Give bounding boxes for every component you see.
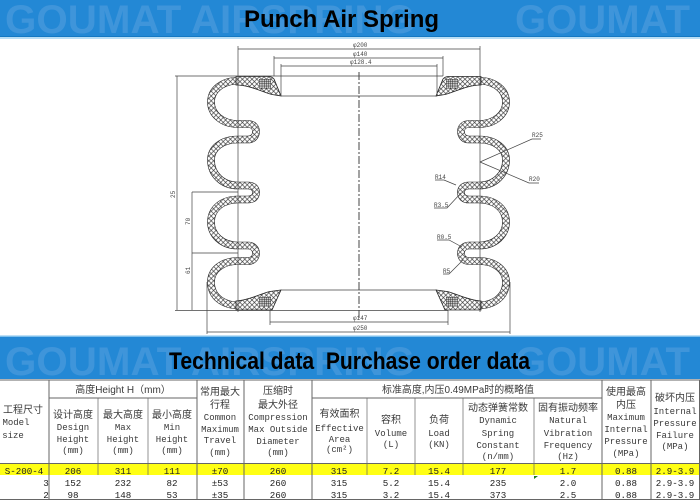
data row: 3: 235 — [490, 478, 506, 489]
column: max height: Height — [107, 435, 139, 445]
column: internal pressure failure: Failure — [656, 431, 694, 441]
data row: S-200-4: 7.2 — [383, 466, 399, 477]
column: model size: 工程尺寸 — [3, 403, 43, 416]
title: Punch Air Spring — [244, 6, 439, 33]
data row: 3: 0.88 — [615, 478, 637, 489]
centre line — [358, 72, 360, 318]
data row: 3: 5.2 — [383, 478, 399, 489]
column: min height: (mm) — [161, 446, 183, 456]
data row: S-200-4: 111 — [164, 466, 181, 477]
column: maximum travel: Common — [204, 413, 236, 423]
column: max height — [103, 408, 143, 456]
column: maximum internal pressure: Pressure — [604, 437, 648, 447]
cell comment marker — [534, 476, 538, 479]
dimension labels: R3.5 — [434, 202, 449, 209]
data row: S-200-4: 260 — [270, 466, 286, 477]
column: dynamic spring constant: 动态弹簧常数 — [468, 401, 528, 414]
column: design height: Height — [57, 435, 89, 445]
dimension labels — [170, 42, 543, 332]
data row: 3: 2.0 — [560, 478, 576, 489]
column: load: 负荷 — [429, 413, 449, 426]
column: model size: size — [2, 431, 24, 441]
column: effective area: (cm²) — [326, 445, 353, 455]
column: compression diameter — [248, 384, 308, 458]
data row: 3: 152 — [65, 478, 81, 489]
technical drawing: air spring cross-section — [170, 42, 543, 334]
data row: S-200-4: 15.4 — [428, 466, 451, 477]
specification table — [0, 380, 700, 500]
column: dynamic spring constant: (n/mm) — [482, 452, 514, 462]
dimension labels: 25 — [170, 190, 177, 198]
column: effective area: Area — [329, 435, 351, 445]
column: max height: 最大高度 — [103, 408, 143, 421]
column: dynamic spring constant: Dynamic — [479, 416, 517, 426]
column: compression diameter: 压缩时 — [263, 384, 293, 397]
left half of spring bellows — [211, 76, 281, 310]
column: maximum internal pressure: (MPa) — [612, 449, 640, 459]
column: natural vibration frequency: Natural — [549, 416, 587, 426]
data row: 3: 15.4 — [428, 478, 451, 489]
data row: 3: 260 — [270, 478, 286, 489]
data row: 3: 3 — [43, 478, 49, 489]
data row: 3: 2.9-3.9 — [656, 478, 694, 489]
data row: 3: 232 — [115, 478, 131, 489]
column: compression diameter: 最大外径 — [258, 398, 298, 411]
column: volume: Volume — [375, 429, 407, 439]
column: maximum travel: (mm) — [209, 448, 231, 458]
dimension labels: φ200 — [353, 42, 368, 49]
data row: S-200-4: S-200-4 — [5, 466, 44, 477]
column: load: Load — [428, 429, 450, 439]
column: maximum travel: Maximum — [201, 425, 239, 435]
data row: 3: ±53 — [212, 478, 228, 489]
dimension labels: R14 — [435, 174, 446, 181]
column: effective area: 有效面积 — [320, 407, 360, 420]
column: maximum travel: Travel — [204, 436, 236, 446]
column: max height: Max — [115, 423, 131, 433]
column: maximum internal pressure: Maximum — [607, 413, 645, 423]
column: min height: 最小高度 — [152, 408, 192, 421]
column: maximum travel: 行程 — [210, 398, 230, 411]
column: min height — [152, 408, 192, 456]
group heading: height: 高度Height H（mm） — [75, 383, 171, 396]
column: maximum internal pressure: 使用最高 — [606, 385, 646, 398]
data row: 3 — [43, 478, 694, 489]
data row: 3: 315 — [331, 478, 347, 489]
column: internal pressure failure: 破坏内压 — [655, 391, 695, 404]
column: design height: (mm) — [62, 446, 84, 456]
column: natural vibration frequency — [538, 401, 598, 462]
column: min height: Min — [164, 423, 180, 433]
column: volume: 容积 — [381, 413, 401, 426]
column: max height: (mm) — [112, 446, 134, 456]
dimension labels: φ128.4 — [350, 59, 372, 66]
column: compression diameter: Compression — [248, 413, 308, 423]
dimension labels: 61 — [185, 266, 192, 274]
column: dynamic spring constant: Constant — [476, 441, 520, 451]
column: maximum internal pressure: 内压 — [616, 398, 636, 411]
column: natural vibration frequency: 固有振动频率 — [538, 401, 598, 414]
column: min height: Height — [156, 435, 188, 445]
column: compression diameter: Max Outside — [248, 425, 308, 435]
watermark: section banner: GOUMAT AIRSPRING — [5, 340, 415, 384]
column: load — [428, 413, 450, 450]
column: design height: 设计高度 — [53, 408, 93, 421]
watermark: section banner right: GOUMAT — [515, 340, 690, 384]
column: effective area: Effective — [315, 424, 364, 434]
data row: S-200-4 — [5, 466, 694, 477]
column: natural vibration frequency: (Hz) — [557, 452, 579, 462]
data row: S-200-4: ±70 — [212, 466, 228, 477]
column: volume — [375, 413, 407, 450]
column: dynamic spring constant — [468, 401, 528, 462]
column: compression diameter: Diameter — [256, 437, 300, 447]
data row: S-200-4: 1.7 — [560, 466, 576, 477]
column: maximum internal pressure — [604, 385, 648, 459]
data row: S-200-4: 206 — [65, 466, 81, 477]
data row: S-200-4: 311 — [115, 466, 132, 477]
column: volume: (L) — [383, 440, 399, 450]
dimension labels: R25 — [532, 132, 543, 139]
dimension lines — [175, 46, 541, 334]
group heading: approximate values: 标准高度,内压0.49MPa时的概略值 — [382, 383, 534, 396]
dimension labels: φ250 — [353, 325, 368, 332]
column: load: (KN) — [428, 440, 450, 450]
dimension labels: φ147 — [353, 315, 368, 322]
column: maximum travel: 常用最大 — [200, 385, 240, 398]
highlighted row background — [0, 464, 700, 475]
column: compression diameter: (mm) — [267, 448, 289, 458]
column: effective area — [315, 407, 364, 455]
section heading: Technical data Purchase order data — [169, 348, 531, 375]
column: internal pressure failure: Pressure — [653, 419, 697, 429]
column: internal pressure failure: (MPa) — [661, 442, 689, 452]
dimension labels: R0.5 — [437, 234, 452, 241]
data row: 2 — [43, 490, 694, 500]
column: internal pressure failure: Internal — [653, 407, 697, 417]
section banner — [0, 336, 700, 384]
column: model size: Model — [2, 418, 30, 428]
data row: S-200-4: 0.88 — [615, 466, 637, 477]
column: model size — [2, 403, 43, 441]
column: design height — [53, 408, 93, 456]
data row: S-200-4: 177 — [490, 466, 506, 477]
column: internal pressure failure — [653, 391, 697, 452]
column: natural vibration frequency: Frequency — [544, 441, 593, 451]
column: natural vibration frequency: Vibration — [544, 429, 592, 439]
column: maximum travel — [200, 385, 240, 458]
table grid — [0, 380, 700, 500]
right half of spring bellows — [436, 76, 506, 310]
dimension labels: R20 — [529, 176, 540, 183]
top banner — [0, 0, 700, 42]
data row: S-200-4: 315 — [331, 466, 347, 477]
dimension labels: 70 — [185, 217, 192, 225]
data row: S-200-4: 2.9-3.9 — [656, 466, 694, 477]
dimension labels: R5 — [443, 268, 451, 275]
column: maximum internal pressure: Internal — [604, 425, 648, 435]
dimension labels: φ140 — [353, 51, 368, 58]
column: design height: Design — [57, 423, 89, 433]
data row: 3: 82 — [166, 478, 178, 489]
column: dynamic spring constant: Spring — [482, 429, 514, 439]
